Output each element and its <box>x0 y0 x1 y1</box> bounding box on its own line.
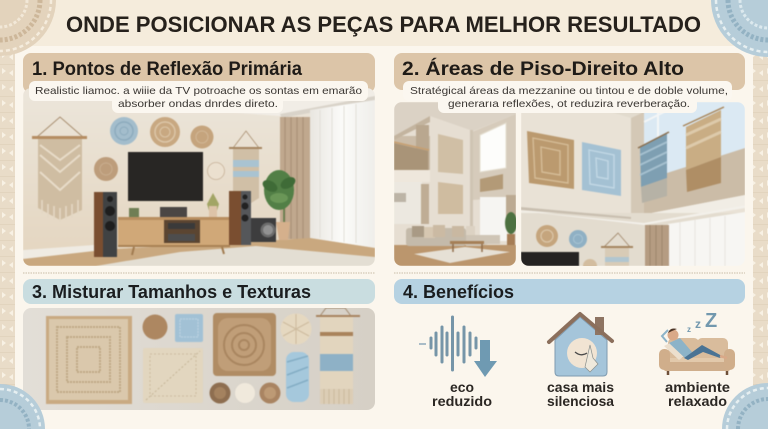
heading 3: 3. Misturar Tamanhos e Texturas <box>32 281 311 302</box>
section header 3 <box>23 279 375 304</box>
close-up wall with crochet pieces illustration <box>521 102 745 273</box>
corner mandala: bottom left <box>0 384 45 429</box>
text bubble 1 <box>29 81 368 113</box>
section header 1 <box>23 53 375 93</box>
icon: zzz sleep letters: Z <box>705 310 717 332</box>
text bubble 1: absorber ondas dnrdes direto. <box>118 98 278 110</box>
label: ambiente relaxado: ambiente <box>665 379 730 395</box>
label: eco reduzido: reduzido <box>432 393 492 409</box>
label: casa mais silenciosa: silenciosa <box>547 393 614 409</box>
section header 2 <box>394 53 745 90</box>
panel: benefícios <box>394 279 745 409</box>
icon: quiet house with moon <box>549 314 612 376</box>
panel: pontos de reflexão primária <box>23 53 375 266</box>
heading 2: 2. Áreas de Piso-Direito Alto <box>402 58 684 80</box>
right decorative strip <box>753 50 768 390</box>
label: eco reduzido <box>432 379 492 409</box>
icon: zzz sleep letters: z <box>695 317 701 331</box>
icon: zzz sleep letters <box>687 310 717 334</box>
text bubble 2 <box>403 81 732 113</box>
panel: misturar tamanhos e texturas <box>23 279 375 410</box>
label: casa mais silenciosa <box>547 379 614 409</box>
corner mandala: top right <box>711 0 768 57</box>
top title band <box>0 0 768 46</box>
text bubble 2: generarıa reflexões, ot reduzira reverberação. <box>448 98 690 110</box>
label: ambiente relaxado <box>665 379 730 409</box>
icon: person relaxing on sofa <box>659 328 735 375</box>
room illustration with TV and wall pieces <box>23 88 375 266</box>
label: casa mais silenciosa: casa mais <box>547 379 614 395</box>
icon: zzz sleep letters: z <box>687 325 691 334</box>
title: ONDE POSICIONAR AS PEÇAS PARA MELHOR RESULTADO <box>66 12 701 37</box>
double-height living room illustration <box>394 102 517 266</box>
heading 1: 1. Pontos de Reflexão Primária <box>32 59 302 80</box>
corner mandala: top left <box>0 0 56 56</box>
left decorative strip <box>0 50 15 390</box>
flat lay of crochet pieces <box>23 308 375 410</box>
corner mandala: bottom right <box>722 383 768 429</box>
label: ambiente relaxado: relaxado <box>668 393 727 409</box>
text bubble 2: Stratégical áreas da mezzanine ou tintou e de doble volume, <box>410 85 728 97</box>
section header 4 <box>394 279 745 304</box>
text bubble 1: Realistic liamoc. a wiiie da TV potroache os sontas em emarão <box>35 85 362 97</box>
heading 4: 4. Benefícios <box>403 281 514 302</box>
panel: áreas de piso-direito alto <box>394 53 745 273</box>
label: eco reduzido: eco <box>450 379 474 395</box>
icon: sound wave with down arrow <box>419 317 497 377</box>
